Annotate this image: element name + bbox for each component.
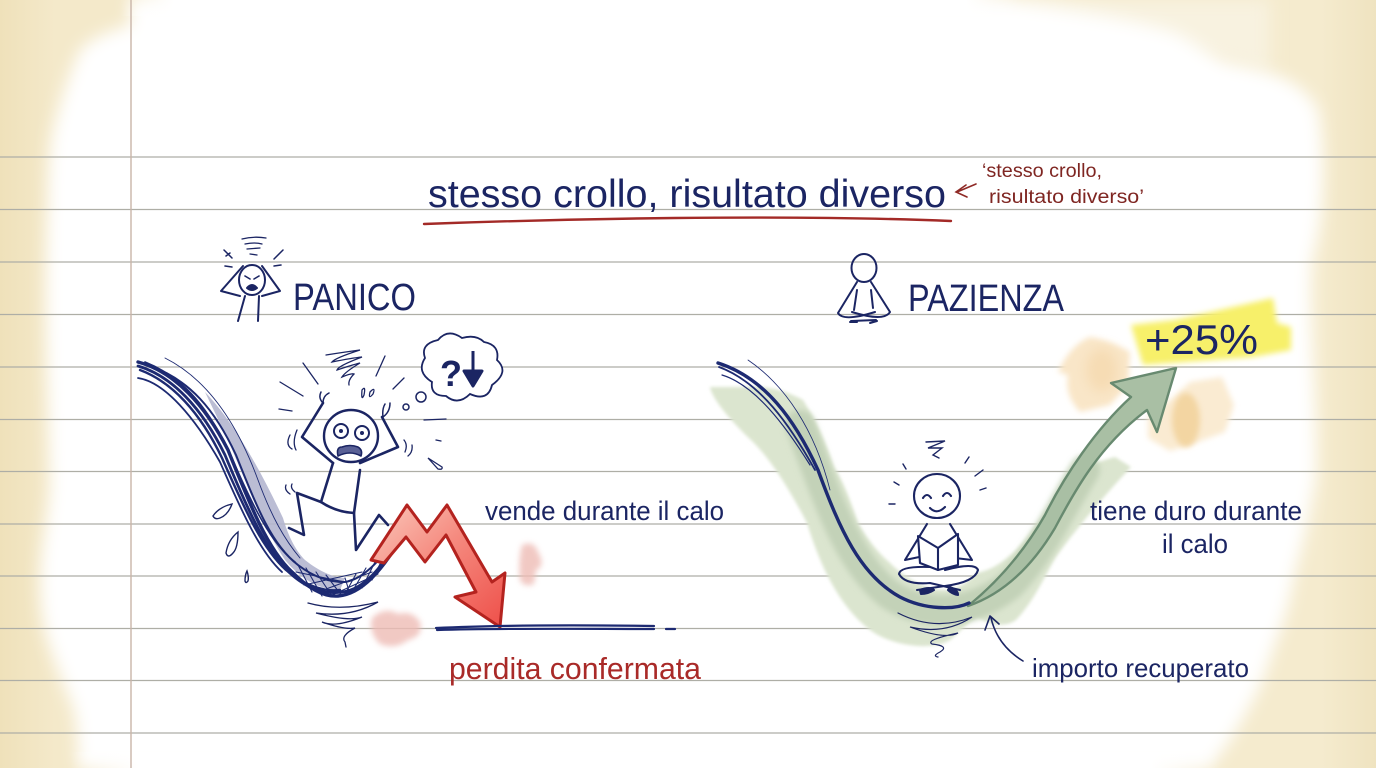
- notebook margin line: [130, 0, 132, 768]
- icon: meditating person: [838, 254, 890, 323]
- label: tiene duro durante il calo: [1090, 496, 1302, 559]
- thought bubble: ?: [440, 353, 462, 394]
- yellow highlight with +25%: [1131, 298, 1291, 365]
- red zigzag arrow: [371, 505, 505, 627]
- navy curve: [718, 360, 969, 608]
- swirl under curve: [308, 602, 378, 647]
- reading stick figure: [899, 474, 978, 595]
- red watercolor blotches: [371, 544, 542, 646]
- label: perdita confermata: perdita confermata: [449, 651, 702, 686]
- orange watercolor blotches: [1058, 337, 1234, 451]
- heading: pazienza: PAZIENZA: [908, 278, 1065, 320]
- label: vende durante il calo: vende durante il calo: [485, 496, 724, 526]
- flat line: [436, 625, 675, 630]
- label: tiene duro durante il calo: tiene duro durante: [1090, 496, 1302, 526]
- thought bubble: [403, 333, 502, 410]
- calm marks: [889, 441, 986, 504]
- panel: panico: [138, 237, 724, 686]
- panel: pazienza: [710, 254, 1302, 683]
- title annotation: [956, 161, 1144, 208]
- title annotation: ‘stesso crollo,: [982, 161, 1102, 182]
- title: stesso crollo, risultato diverso: [428, 173, 946, 216]
- notebook ruled lines: [0, 157, 1376, 733]
- label: importo recuperato: importo recuperato: [1032, 653, 1249, 683]
- motion marks: [279, 350, 446, 494]
- label: tiene duro durante il calo: il calo: [1162, 529, 1228, 559]
- yellow highlight with +25%: +25%: [1145, 316, 1258, 363]
- falling curve: [138, 358, 400, 596]
- swirl under curve: [898, 613, 972, 657]
- sweat drops: [213, 504, 248, 582]
- icon: panicking head: [221, 237, 283, 321]
- arrow to amount recovered: [985, 616, 1023, 661]
- title annotation: risultato diverso’: [989, 187, 1144, 208]
- green watercolor band: [710, 387, 1131, 646]
- heading: panico: PANICO: [293, 277, 416, 319]
- green recovery arrow: [968, 368, 1176, 606]
- panicking stick figure: [289, 392, 398, 550]
